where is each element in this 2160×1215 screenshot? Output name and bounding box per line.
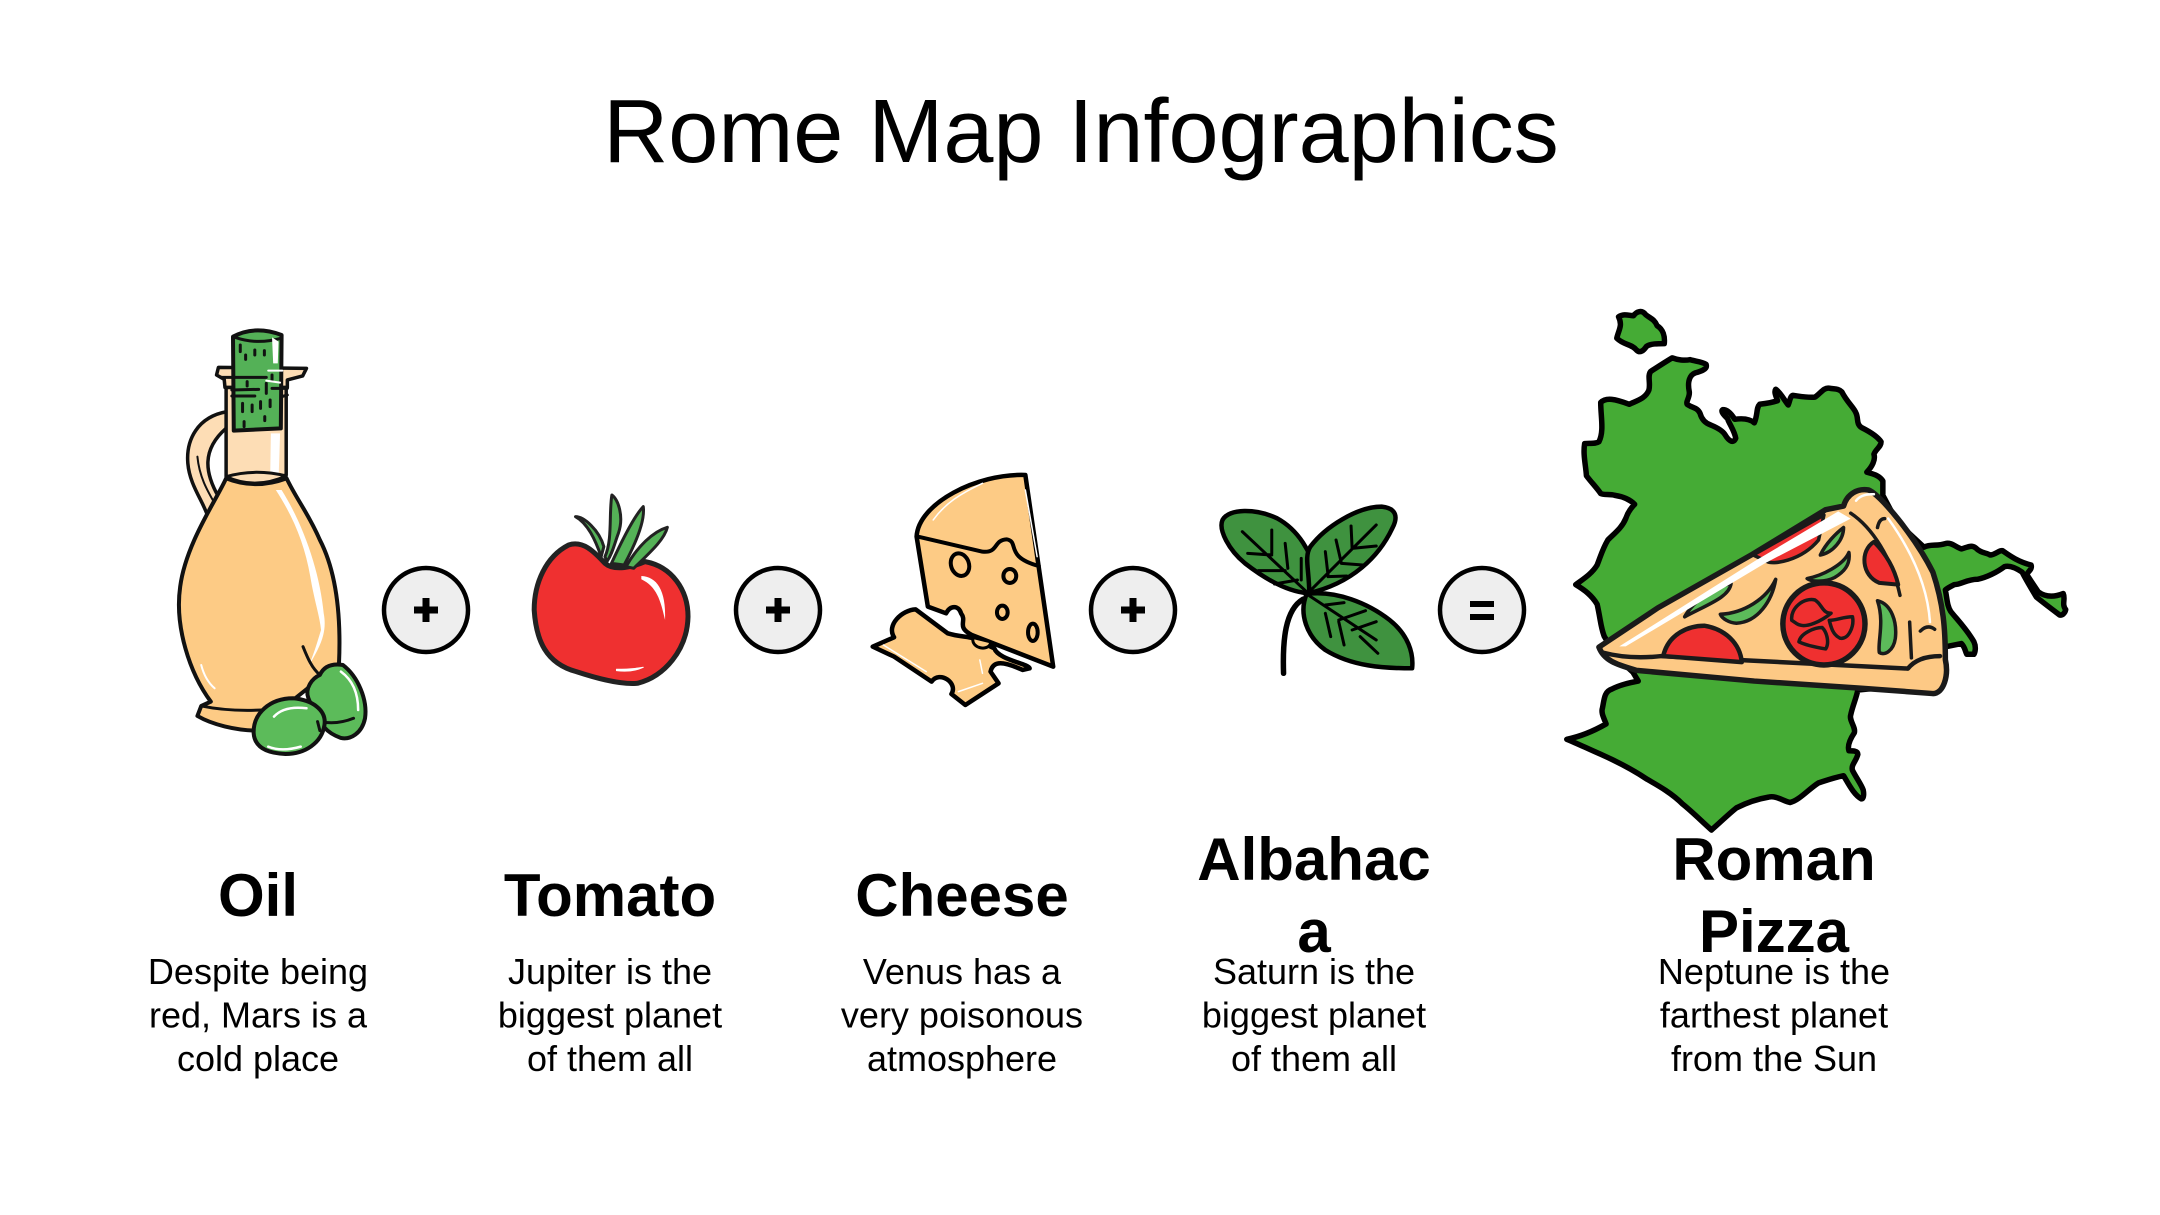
column: roman pizza: Roman xyxy=(1672,826,1876,893)
pizza slice xyxy=(1599,490,1946,694)
column: albahaca: a xyxy=(1297,898,1331,965)
icon: cheese xyxy=(873,475,1053,705)
column: albahaca: of them all xyxy=(1231,1038,1397,1079)
column: cheese xyxy=(841,862,1083,1079)
column: oil: Despite being xyxy=(148,951,368,992)
operator: equals xyxy=(1440,568,1524,652)
map island xyxy=(1617,312,1664,352)
column: oil: Oil xyxy=(218,862,298,929)
icon: basil leaves xyxy=(1222,507,1412,673)
map mainland xyxy=(1567,358,2066,830)
map of Rome with pizza slice xyxy=(1567,312,2066,830)
column: cheese: Cheese xyxy=(855,862,1069,929)
column: albahaca: Albahac xyxy=(1197,826,1431,893)
column: albahaca: Saturn is the xyxy=(1213,951,1415,992)
column: roman pizza: Neptune is the xyxy=(1658,951,1890,992)
column: roman pizza xyxy=(1658,826,1890,1079)
operator: plus 1 xyxy=(384,568,468,652)
column: albahaca xyxy=(1197,826,1431,1079)
column: cheese: very poisonous xyxy=(841,994,1083,1035)
operator: plus 2 xyxy=(736,568,820,652)
column: roman pizza: from the Sun xyxy=(1671,1038,1877,1079)
column: cheese: Venus has a xyxy=(863,951,1062,992)
title: Rome Map Infographics xyxy=(603,82,1559,182)
column: albahaca: biggest planet xyxy=(1202,994,1426,1035)
column: tomato: Jupiter is the xyxy=(508,951,712,992)
column: oil xyxy=(148,862,368,1079)
column: roman pizza: Pizza xyxy=(1699,898,1850,965)
icon: tomato xyxy=(534,495,688,684)
operator: plus 3 xyxy=(1091,568,1175,652)
column: cheese: atmosphere xyxy=(867,1038,1057,1079)
icon: oil bottle with olives xyxy=(179,330,365,754)
column: roman pizza: farthest planet xyxy=(1660,994,1888,1035)
column: tomato xyxy=(498,862,722,1079)
column: oil: red, Mars is a xyxy=(149,994,368,1035)
column: tomato: biggest planet xyxy=(498,994,722,1035)
column: oil: cold place xyxy=(177,1038,339,1079)
column: tomato: Tomato xyxy=(504,862,716,929)
column: tomato: of them all xyxy=(527,1038,693,1079)
